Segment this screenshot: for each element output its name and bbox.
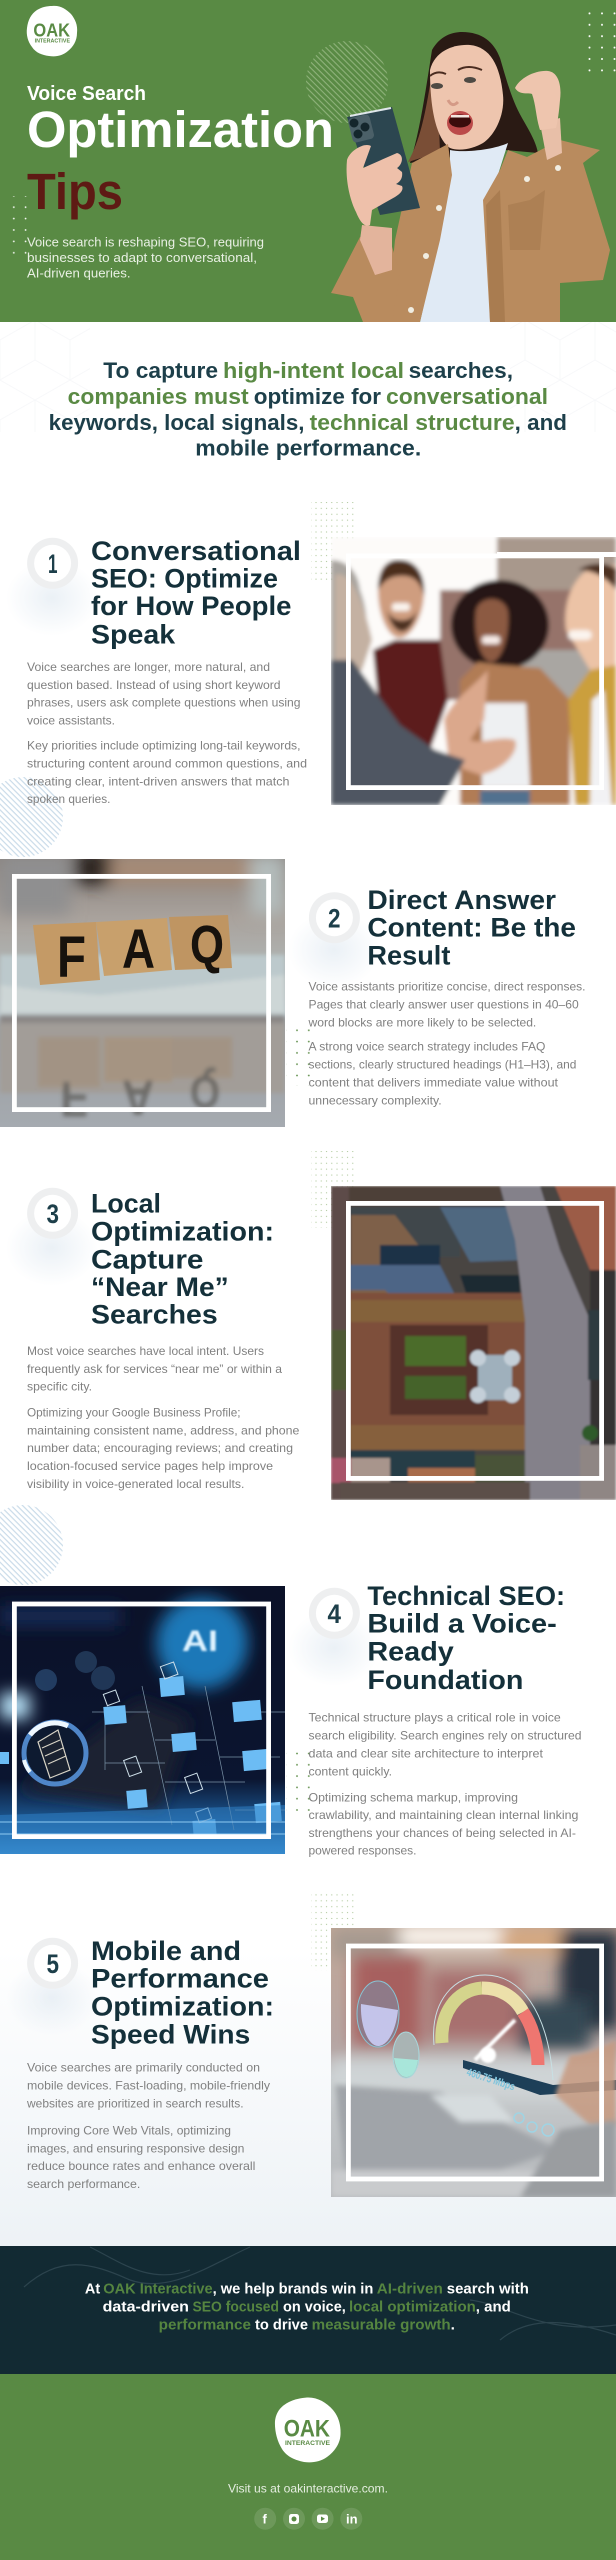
body text: maintaining consistent name, address, and phone [27, 1423, 300, 1437]
body text: specific city. [27, 1380, 92, 1394]
panel: section 5 mobile and performance [6, 1893, 616, 2197]
heading: for How People [91, 591, 292, 621]
logo: OAK Interactive: OAK [33, 20, 71, 41]
logo: OAK Interactive: INTERACTIVE [285, 2441, 330, 2447]
hero title: Voice Search [27, 83, 146, 105]
photo: aerial view of city buildings [331, 1186, 616, 1500]
photo: FAQ wooden blocks on keyboard: Q [190, 915, 224, 975]
panel: closing statement: , we help brands win in [213, 2281, 373, 2297]
body text: Voice searches are primarily conducted on [27, 2061, 260, 2075]
heading: Local [91, 1189, 161, 1219]
panel: intro statement: companies must [68, 384, 249, 409]
hero description [27, 234, 264, 280]
body text: Key priorities include optimizing long-tail keywords, [27, 738, 300, 752]
logo: OAK Interactive [275, 2397, 341, 2462]
photo: FAQ wooden blocks on keyboard [0, 850, 285, 1127]
panel: intro statement: searches, [409, 358, 513, 383]
body text: number data; encouraging reviews; and creating [27, 1441, 293, 1455]
panel: hero [0, 0, 616, 322]
body text [27, 1344, 300, 1491]
body text: Most voice searches have local intent. Users [27, 1344, 264, 1358]
logo: OAK Interactive: INTERACTIVE [35, 39, 71, 45]
heading: Content: Be the [367, 913, 576, 943]
body text: search eligibility. Search engines rely on structured [308, 1728, 582, 1742]
panel: closing statement: to drive [255, 2317, 308, 2333]
panel: closing statement [0, 2246, 616, 2374]
heading: Direct Answer [367, 885, 556, 915]
panel: section 3 local optimization [0, 1151, 616, 1585]
body text: Pages that clearly answer user questions in 40–60 [308, 998, 579, 1012]
image frame 1 [348, 556, 602, 788]
hero title: Tips [27, 163, 123, 220]
photo: speed gauges over laptop [331, 1925, 616, 2197]
heading: Foundation [367, 1665, 523, 1695]
panel: closing statement: SEO focused [192, 2299, 279, 2315]
photo: speed gauges over laptop: 460.75 Mbps [465, 2066, 516, 2093]
heading: “Near Me” [91, 1272, 229, 1302]
body text: Optimizing your Google Business Profile; [27, 1405, 240, 1419]
heading: Result [367, 940, 451, 970]
photo: FAQ wooden blocks on keyboard: A [122, 1069, 154, 1125]
body text: websites are prioritized in search results. [26, 2096, 244, 2110]
body text: Technical structure plays a critical role in voice [308, 1711, 561, 1725]
heading [91, 536, 301, 649]
hero description: Voice search is reshaping SEO, requiring [27, 234, 264, 250]
badge 3: 3 [46, 1199, 59, 1229]
body text: search performance. [27, 2177, 140, 2191]
panel: closing statement: AI-driven [377, 2281, 443, 2297]
heading: Conversational [91, 536, 301, 566]
logo: OAK Interactive: OAK [284, 2416, 331, 2443]
image frame 5 [348, 1946, 602, 2179]
body text: strengthens your chances of being selected in AI- [308, 1826, 576, 1840]
image frame 3 [348, 1203, 602, 1478]
panel: closing statement: data-driven [103, 2299, 189, 2315]
body text: sections, clearly structured headings (H1–H3), and [308, 1058, 576, 1072]
badge 2: 2 [328, 904, 340, 934]
body text: phrases, users ask complete questions when using [27, 696, 300, 710]
panel: intro statement: To capture [103, 358, 218, 383]
hero description: businesses to adapt to conversational, [27, 250, 257, 265]
body text: Optimizing schema markup, improving [308, 1790, 518, 1804]
badge 3 [6, 1188, 98, 1286]
website link text: Visit us at oakinteractive.com. [228, 2482, 388, 2496]
heading: Optimization: [91, 1992, 274, 2022]
body text: content quickly. [308, 1764, 392, 1778]
heading: Optimization: [91, 1217, 274, 1247]
badge 5 [6, 1938, 98, 2036]
body text: data and clear site architecture to interpret [308, 1746, 544, 1760]
panel: footer [0, 2374, 616, 2560]
heading: Speak [91, 619, 175, 649]
hero description: AI-driven queries. [27, 266, 130, 280]
body text [27, 660, 307, 806]
body text: powered responses. [308, 1844, 416, 1858]
panel: intro statement: optimize for [254, 384, 381, 409]
body text [307, 980, 586, 1107]
body text: reduce bounce rates and enhance overall [27, 2159, 255, 2173]
heading: Performance [91, 1964, 269, 1994]
badge 1 [6, 538, 98, 636]
panel: closing statement: search with [447, 2281, 529, 2297]
panel: intro statement [0, 322, 616, 480]
photo: FAQ wooden blocks on keyboard: Q [190, 1066, 220, 1118]
heading: Mobile and [91, 1936, 241, 1966]
panel: intro statement: technical structure [310, 410, 515, 435]
panel: closing statement: local optimization [349, 2299, 476, 2315]
heading [91, 1936, 274, 2049]
body text: content that delivers immediate value without [308, 1076, 559, 1090]
body text: creating clear, intent-driven answers that match [27, 774, 290, 788]
panel: intro statement: high-intent local [223, 358, 404, 383]
panel: closing statement: At [85, 2281, 100, 2297]
panel: closing statement: performance [159, 2317, 251, 2333]
social icons: f [262, 2512, 268, 2526]
heading [91, 1189, 274, 1329]
heading: Ready [367, 1637, 454, 1667]
body text: images, and ensuring responsive design [27, 2141, 244, 2155]
panel: intro statement: conversational [386, 384, 548, 409]
social icons [254, 2508, 362, 2530]
photo: surprised woman with phone [331, 32, 610, 322]
panel: closing statement: measurable growth [312, 2317, 451, 2333]
photo: AI folder network over keyboard: AI [182, 1625, 218, 1658]
hero title: Optimization [27, 101, 334, 158]
panel: section 2 direct answer content [0, 850, 586, 1127]
body text: mobile devices. Fast-loading, mobile-friendly [27, 2078, 270, 2092]
heading [367, 885, 576, 970]
heading: Technical SEO: [367, 1581, 565, 1611]
heading: Searches [91, 1299, 218, 1329]
photo: AI folder network over keyboard [0, 1586, 285, 1854]
social icons: in [346, 2512, 358, 2526]
body text: location-focused service pages help improve [27, 1459, 273, 1473]
photo: smiling group of people [331, 537, 616, 805]
badge 5: 5 [46, 1949, 59, 1979]
body text: voice assistants. [27, 714, 115, 728]
panel: closing statement: OAK Interactive [103, 2281, 213, 2297]
panel: section 1 conversational SEO [0, 502, 616, 857]
hero title [27, 83, 334, 220]
body text [26, 2061, 270, 2191]
panel: section 4 technical SEO [0, 1581, 582, 1858]
panel: closing statement: , and [476, 2299, 511, 2315]
badge 4: 4 [328, 1599, 341, 1629]
body text: question based. Instead of using short keyword [27, 678, 280, 692]
heading: Speed Wins [91, 2019, 250, 2049]
body text [308, 1711, 582, 1858]
body text: Improving Core Web Vitals, optimizing [27, 2123, 231, 2137]
body text: unnecessary complexity. [308, 1093, 442, 1107]
photo: FAQ wooden blocks on keyboard: A [122, 917, 155, 980]
body text: crawlability, and maintaining clean internal linking [308, 1808, 578, 1822]
panel: closing statement: on voice, [283, 2299, 346, 2315]
photo: FAQ wooden blocks on keyboard: F [60, 1071, 88, 1127]
body text: visibility in voice-generated local results. [27, 1477, 244, 1491]
body text: structuring content around common questions, and [27, 756, 307, 770]
body text: Voice searches are longer, more natural, and [27, 660, 270, 674]
body text: frequently ask for services “near me” or within a [27, 1362, 282, 1376]
photo: FAQ wooden blocks on keyboard: F [57, 925, 86, 990]
badge 1: 1 [48, 549, 58, 579]
body text: A strong voice search strategy includes FAQ [308, 1040, 545, 1054]
image frame 2 [14, 876, 269, 1110]
heading: Capture [91, 1244, 204, 1274]
panel: intro statement: keywords, local signals, [49, 410, 305, 435]
image frame 4 [14, 1604, 269, 1837]
logo: OAK Interactive [27, 6, 77, 56]
heading: SEO: Optimize [91, 563, 278, 593]
heading [367, 1581, 565, 1695]
body text: word blocks are more likely to be selected. [307, 1016, 536, 1030]
body text: spoken queries. [27, 792, 110, 806]
panel: intro statement: , and [515, 410, 567, 435]
panel: intro statement: mobile performance. [195, 436, 421, 461]
panel: closing statement: . [451, 2317, 455, 2333]
badge 2 [288, 892, 380, 988]
heading: Build a Voice- [367, 1609, 557, 1639]
badge 4 [288, 1588, 380, 1686]
body text: Voice assistants prioritize concise, direct responses. [308, 980, 586, 994]
